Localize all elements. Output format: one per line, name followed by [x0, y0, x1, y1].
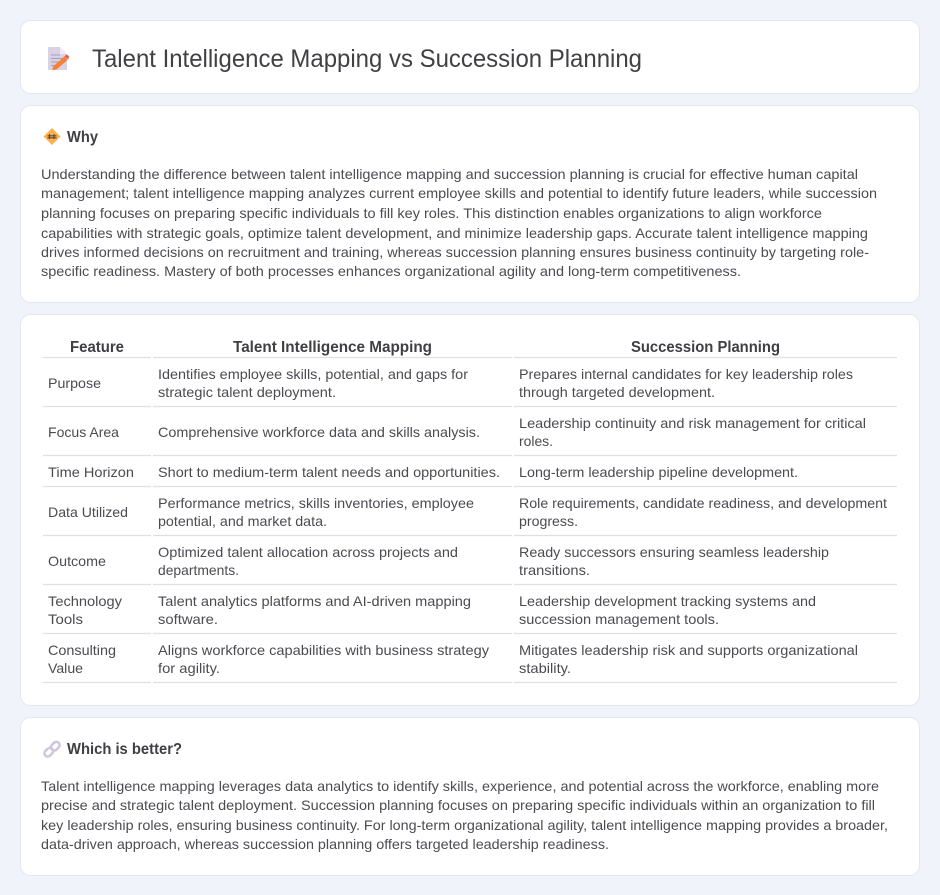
row: consulting value: Aligns workforce capabilities with business strategy [158, 642, 489, 658]
row: outcome: Optimized talent allocation across projects and [158, 544, 458, 560]
text block: why paragraph: Understanding the difference between talent intelligence mapping and succession planning is crucial for effective human capital [41, 166, 858, 182]
table header row: Feature [70, 339, 124, 356]
row: technology tools: Leadership development tracking systems and [519, 593, 816, 609]
row: purpose: Identifies employee skills, potential, and gaps for [158, 366, 468, 382]
row: purpose: strategic talent deployment. [158, 384, 336, 400]
table header row [43, 339, 897, 358]
row: technology tools: Tools [48, 611, 83, 627]
row: consulting value: Consulting [48, 642, 116, 658]
panel: title header [20, 20, 920, 94]
icon: link [43, 741, 61, 758]
row: technology tools: Talent analytics platforms and AI-driven mapping [158, 593, 471, 609]
panel: comparison table [20, 314, 920, 706]
row: data utilized: Data Utilized [48, 504, 128, 520]
row: purpose: Purpose [48, 375, 101, 391]
row: outcome: Outcome [48, 553, 106, 569]
row: focus area: Focus Area [48, 424, 119, 440]
row: consulting value: for agility. [158, 660, 220, 676]
row: time horizon [43, 464, 897, 486]
row: technology tools: Technology [48, 593, 122, 609]
icon: warning diamond [44, 128, 60, 145]
text block: which is better paragraph [41, 778, 888, 852]
row: outcome: departments. [158, 562, 239, 578]
title: Talent Intelligence Mapping vs Succession Planning [92, 45, 642, 73]
row: purpose: through targeted development. [519, 384, 715, 400]
row: technology tools: succession management tools. [519, 611, 719, 627]
icon: document with pencil [48, 47, 69, 70]
text block: why paragraph: specific readiness. Mastery of both processes enhances organizational agility and long-term competitiveness. [41, 263, 741, 279]
row: consulting value: stability. [519, 660, 571, 676]
panel: why [20, 106, 920, 302]
table header row: Talent Intelligence Mapping [233, 339, 432, 356]
text block: why paragraph: capabilities with strategic goals, optimize talent development, and minimize leadership gaps. Accurate talent intelligence mapping [41, 225, 868, 241]
row: purpose: Prepares internal candidates for key leadership roles [519, 366, 853, 382]
row: technology tools [43, 593, 897, 634]
row: outcome [43, 544, 897, 584]
row: focus area: roles. [519, 433, 553, 449]
row: time horizon: Long-term leadership pipeline development. [519, 464, 798, 480]
row: data utilized: Role requirements, candidate readiness, and development [519, 495, 887, 511]
row: data utilized: Performance metrics, skills inventories, employee [158, 495, 474, 511]
row: consulting value: Value [48, 660, 83, 676]
text block: why paragraph [41, 166, 877, 279]
row: data utilized: progress. [519, 513, 578, 529]
row: outcome: Ready successors ensuring seamless leadership [519, 544, 829, 560]
row: purpose [43, 366, 897, 406]
row: outcome: transitions. [519, 562, 590, 578]
row: time horizon: Time Horizon [48, 464, 134, 480]
row: data utilized [43, 495, 897, 536]
text block: which is better paragraph: Talent intelligence mapping leverages data analytics to identify skills, experience, and potential across the workforce, enabling more [41, 778, 879, 794]
row: data utilized: potential, and market data. [158, 513, 327, 529]
text block: which is better paragraph: key leadership roles, ensuring business continuity. For long-term organizational agility, talent intelligence mapping provides a broader, [41, 817, 888, 833]
row: consulting value [43, 642, 897, 682]
text block: which is better paragraph: precise and strategic talent deployment. Succession planning focuses on preparing specific individuals within an organization to fill [41, 797, 875, 813]
row: time horizon: Short to medium-term talent needs and opportunities. [158, 464, 500, 480]
row: focus area: Comprehensive workforce data and skills analysis. [158, 424, 480, 440]
text block: why paragraph: management; talent intelligence mapping analyzes current employee skills and potential to identify future leaders, while succession [41, 185, 877, 201]
heading: why: Why [67, 129, 98, 146]
row: focus area [43, 415, 897, 456]
heading: which is better: Which is better? [67, 741, 182, 758]
row: consulting value: Mitigates leadership risk and supports organizational [519, 642, 858, 658]
row: focus area: Leadership continuity and risk management for critical [519, 415, 866, 431]
table header row: Succession Planning [631, 339, 780, 356]
panel: which is better [20, 718, 920, 876]
text block: why paragraph: drives informed decisions on recruitment and training, whereas succession planning ensures business continuity by targeting role- [41, 244, 869, 260]
row: technology tools: software. [158, 611, 218, 627]
text block: which is better paragraph: data-driven approach, whereas succession planning offers targeted leadership readiness. [41, 836, 609, 852]
text block: why paragraph: planning focuses on preparing specific individuals to fill key roles. This distinction enables organizations to align workforce [41, 205, 822, 221]
